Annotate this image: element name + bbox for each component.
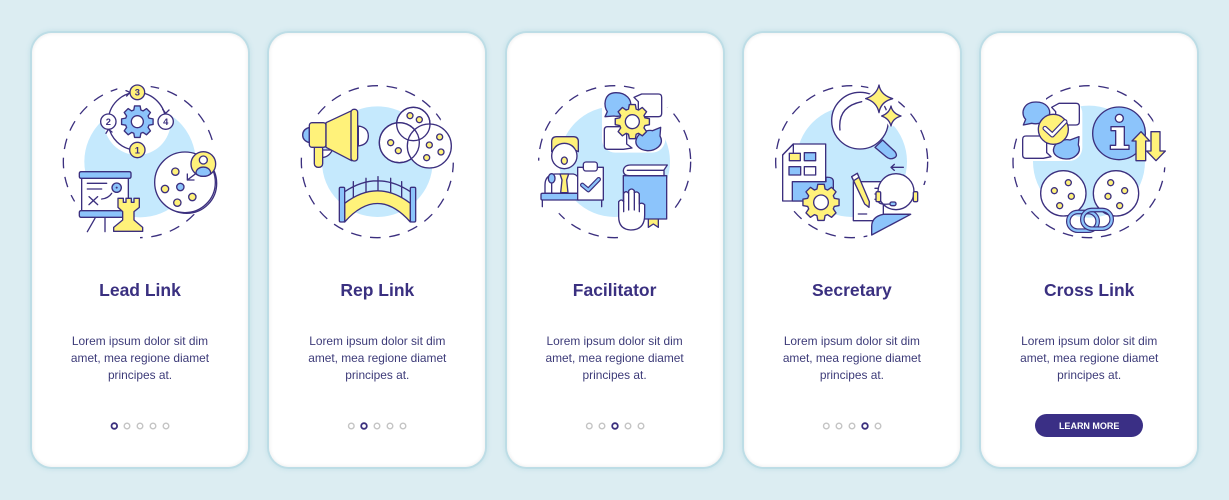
text block: Lorem ipsum dolor sit dim	[1021, 334, 1157, 348]
text block	[1020, 334, 1158, 382]
button: learn more: LEARN MORE	[1059, 421, 1119, 431]
text block: amet, mea regione diamet	[1020, 351, 1158, 365]
text block: principes at.	[583, 368, 647, 382]
text block	[546, 334, 684, 382]
heading: Secretary	[812, 280, 892, 300]
pagination dots	[110, 422, 170, 430]
icon: lead link illustration: 4	[163, 117, 169, 127]
pagination dots	[586, 422, 644, 430]
heading: Lead Link	[99, 280, 181, 300]
icon: lead link illustration	[62, 84, 218, 238]
text block: Lorem ipsum dolor sit dim	[309, 334, 445, 348]
text block	[783, 334, 921, 382]
icon: secretary illustration	[775, 84, 928, 238]
icon: lead link illustration: 3	[135, 88, 140, 98]
heading: Facilitator	[573, 280, 656, 300]
text block	[308, 334, 446, 382]
text block: amet, mea regione diamet	[71, 351, 209, 365]
icon: facilitator illustration	[538, 85, 692, 238]
icon: cross link illustration	[1012, 85, 1166, 238]
pagination dots	[822, 422, 882, 430]
pagination dots	[348, 422, 406, 430]
panel: Rep Link	[269, 33, 485, 467]
heading: Rep Link	[340, 280, 414, 300]
text block: principes at.	[345, 368, 409, 382]
text block: amet, mea regione diamet	[783, 351, 921, 365]
panel: Facilitator	[507, 33, 723, 467]
panel: Cross Link	[981, 33, 1197, 467]
icon: lead link illustration: 2	[106, 117, 111, 127]
text block: principes at.	[1057, 368, 1121, 382]
text block: Lorem ipsum dolor sit dim	[72, 334, 208, 348]
heading: Cross Link	[1044, 280, 1134, 300]
button: learn more	[1035, 414, 1143, 437]
text block	[71, 334, 209, 382]
panel: Secretary	[744, 33, 960, 467]
text block: principes at.	[108, 368, 172, 382]
panel: Lead Link	[32, 33, 248, 467]
icon: lead link illustration: 1	[135, 145, 140, 155]
text block: amet, mea regione diamet	[546, 351, 684, 365]
text block: principes at.	[820, 368, 884, 382]
text block: Lorem ipsum dolor sit dim	[547, 334, 683, 348]
text block: Lorem ipsum dolor sit dim	[784, 334, 920, 348]
text block: amet, mea regione diamet	[308, 351, 446, 365]
icon: rep link illustration	[300, 85, 454, 238]
